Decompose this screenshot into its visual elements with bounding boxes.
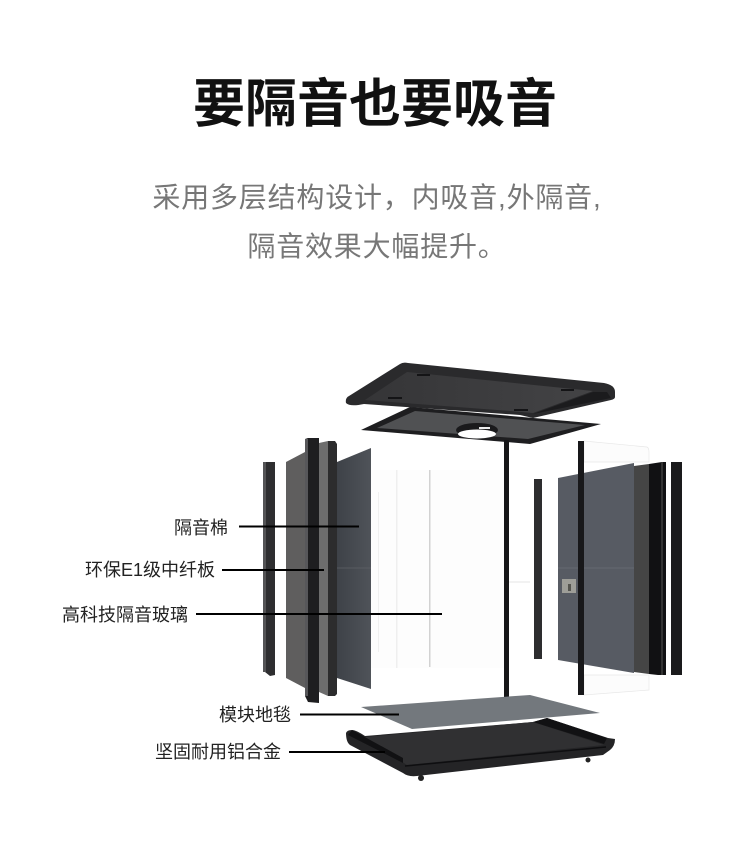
title: 要隔音也要吸音 (193, 76, 557, 134)
floor carpet (361, 695, 600, 729)
subtitle (152, 182, 602, 262)
subtitle: 隔音效果大幅提升。 (247, 231, 507, 262)
leader lines (196, 526, 442, 752)
label: carpet: 模块地毯 (219, 705, 291, 725)
right wall assembly (558, 441, 682, 695)
label: E1 fibreboard: 环保E1级中纤板 (85, 560, 215, 580)
label: sound insulation cotton: 隔音棉 (174, 518, 228, 538)
central pillars (504, 440, 542, 700)
ceiling plate with light (361, 407, 601, 444)
label: glass: 高科技隔音玻璃 (62, 605, 188, 625)
label: aluminium alloy: 坚固耐用铝合金 (155, 742, 281, 762)
roof shell (346, 363, 615, 418)
left wall assembly (263, 438, 371, 703)
door switch (562, 579, 576, 593)
floor tray (346, 718, 615, 781)
glass panels (371, 441, 649, 695)
subtitle: 采用多层结构设计，内吸音,外隔音, (152, 182, 602, 213)
